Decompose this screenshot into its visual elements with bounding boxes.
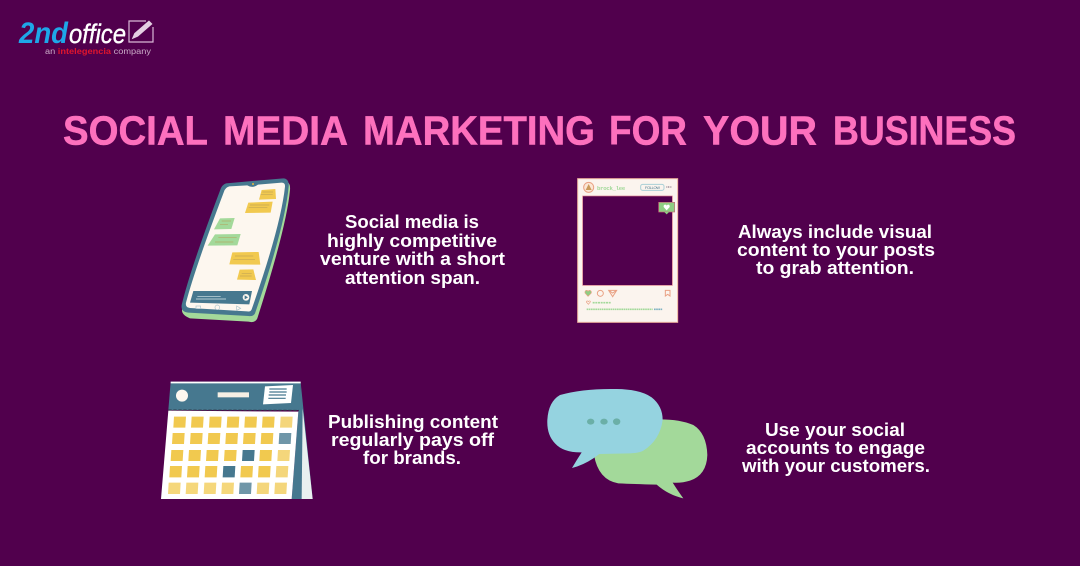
icon: social post frame: FOLLOW: [645, 185, 660, 190]
icon: speech bubbles: [547, 389, 707, 498]
title: [63, 108, 1016, 154]
text: social media competitive: venture with a short: [320, 248, 505, 269]
title: FOR: [609, 108, 687, 154]
title: BUSINESS: [833, 108, 1016, 154]
text: engage customers: accounts to engage: [746, 437, 925, 458]
icon: social post frame: brock_lee: [597, 185, 626, 192]
logo: 2ndoffice: 2nd: [18, 17, 69, 50]
text: publishing regularly: Publishing content: [328, 411, 498, 432]
text: social media competitive: Social media is: [345, 211, 479, 232]
text: visual content: to grab attention.: [756, 257, 914, 278]
calendar cells: [169, 417, 275, 477]
text: publishing regularly: [328, 411, 498, 468]
text: social media competitive: highly competitive: [327, 230, 497, 251]
icon: social post frame: [578, 179, 678, 322]
logo: 2ndoffice: an intelegencia company: [45, 47, 151, 56]
chat bubbles: [259, 189, 276, 200]
icon: smartphone with chat bubbles: [182, 178, 290, 322]
icon: like badge: [659, 202, 675, 214]
text: social media competitive: attention span.: [345, 267, 480, 288]
text: visual content: Always include visual: [738, 221, 932, 242]
text: social media competitive: [320, 211, 505, 288]
title: MARKETING: [363, 108, 595, 154]
title: MEDIA: [223, 108, 348, 154]
text: publishing regularly: regularly pays off: [331, 429, 495, 450]
icon: wall calendar: [161, 382, 313, 499]
text: visual content: [737, 221, 935, 278]
logo: 2ndoffice: office: [69, 19, 126, 49]
text: engage customers: Use your social: [765, 419, 905, 440]
text: engage customers: [741, 419, 930, 476]
logo: 2ndoffice: [18, 17, 153, 56]
text: engage customers: with your customers.: [741, 455, 930, 476]
title: YOUR: [703, 108, 817, 154]
text: visual content: content to your posts: [737, 239, 935, 260]
text: publishing regularly: for brands.: [363, 447, 461, 468]
title: SOCIAL: [63, 108, 208, 154]
